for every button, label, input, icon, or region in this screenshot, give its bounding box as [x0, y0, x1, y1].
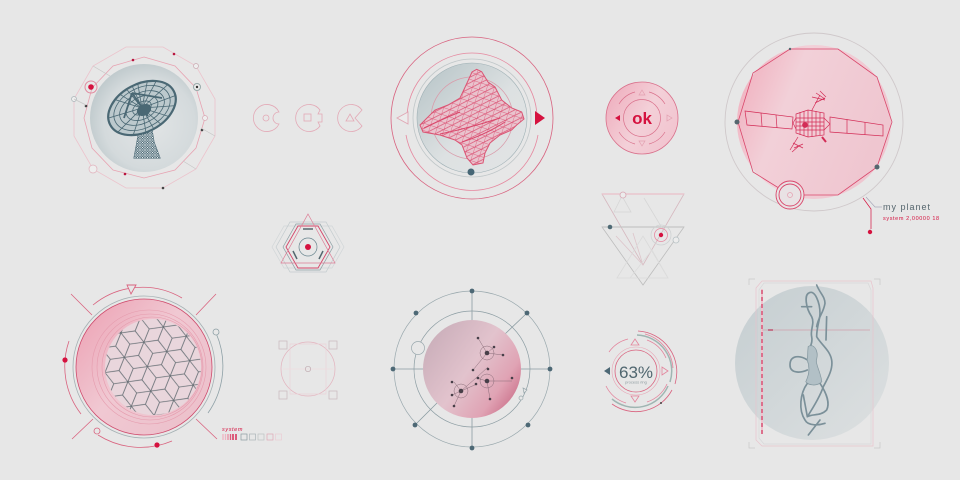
label: my planet — [883, 202, 931, 212]
arcs — [606, 331, 677, 412]
open nodes — [412, 342, 527, 400]
left arc — [65, 341, 81, 414]
frame — [749, 279, 880, 448]
icon: nested triangles — [602, 192, 684, 285]
label: ok — [632, 109, 652, 128]
panel: radar dish — [72, 47, 215, 189]
network — [452, 338, 512, 406]
icon: hexagon target — [272, 214, 344, 272]
icons: three small glyph circles — [253, 104, 362, 132]
spokes — [393, 291, 550, 447]
panel: molecule — [391, 289, 552, 450]
value: 63% — [619, 363, 653, 382]
nodes — [734, 48, 880, 169]
sublabel: system 2,00000 18 — [883, 216, 940, 222]
corner lines — [71, 294, 217, 439]
small nodes — [608, 192, 679, 243]
concentric rings — [92, 310, 206, 424]
leader lines — [866, 197, 882, 207]
panel: wireframe mountain — [391, 37, 553, 199]
legend label: system — [222, 427, 243, 433]
wireframe terrain — [420, 70, 524, 164]
panel: satellite — [725, 33, 940, 234]
icon: filament — [790, 285, 832, 435]
pink disc — [737, 45, 891, 199]
bottom dot — [468, 168, 474, 176]
panel: filament specimen — [735, 279, 889, 448]
outer polygon — [74, 47, 215, 188]
node dots — [72, 53, 208, 189]
orbit rings — [394, 291, 550, 447]
polygon — [738, 49, 892, 195]
cube sphere — [105, 319, 201, 415]
triangles — [631, 339, 668, 402]
small lens — [776, 181, 804, 209]
panel: sphere — [62, 285, 282, 448]
top arc — [93, 287, 182, 305]
rings — [391, 37, 553, 199]
dashed scale — [761, 289, 763, 434]
dish disc — [90, 64, 198, 172]
bottom arc — [98, 435, 172, 447]
target dot red — [85, 81, 97, 93]
pink disc — [423, 320, 521, 418]
caption: process ring — [625, 380, 647, 384]
triangle marker — [127, 285, 136, 294]
right arc — [208, 333, 223, 413]
panel: 63 percent gauge — [604, 331, 677, 412]
panel: ok button — [606, 82, 678, 154]
crosshair line — [762, 329, 870, 331]
arrow right — [535, 111, 545, 125]
disc — [735, 286, 889, 440]
icon: circle with corner squares — [279, 341, 337, 399]
outer ring — [725, 33, 903, 211]
target — [651, 225, 671, 245]
icon: satellite dish — [107, 80, 177, 158]
outer nodes — [391, 289, 552, 450]
arrows — [639, 90, 672, 146]
legend bars — [223, 434, 282, 440]
outer gray ring — [73, 296, 215, 438]
pink ball — [76, 299, 212, 435]
icon: satellite body — [745, 91, 883, 152]
inner polygon — [84, 57, 205, 178]
arrow left — [397, 112, 408, 124]
disc — [417, 63, 527, 173]
